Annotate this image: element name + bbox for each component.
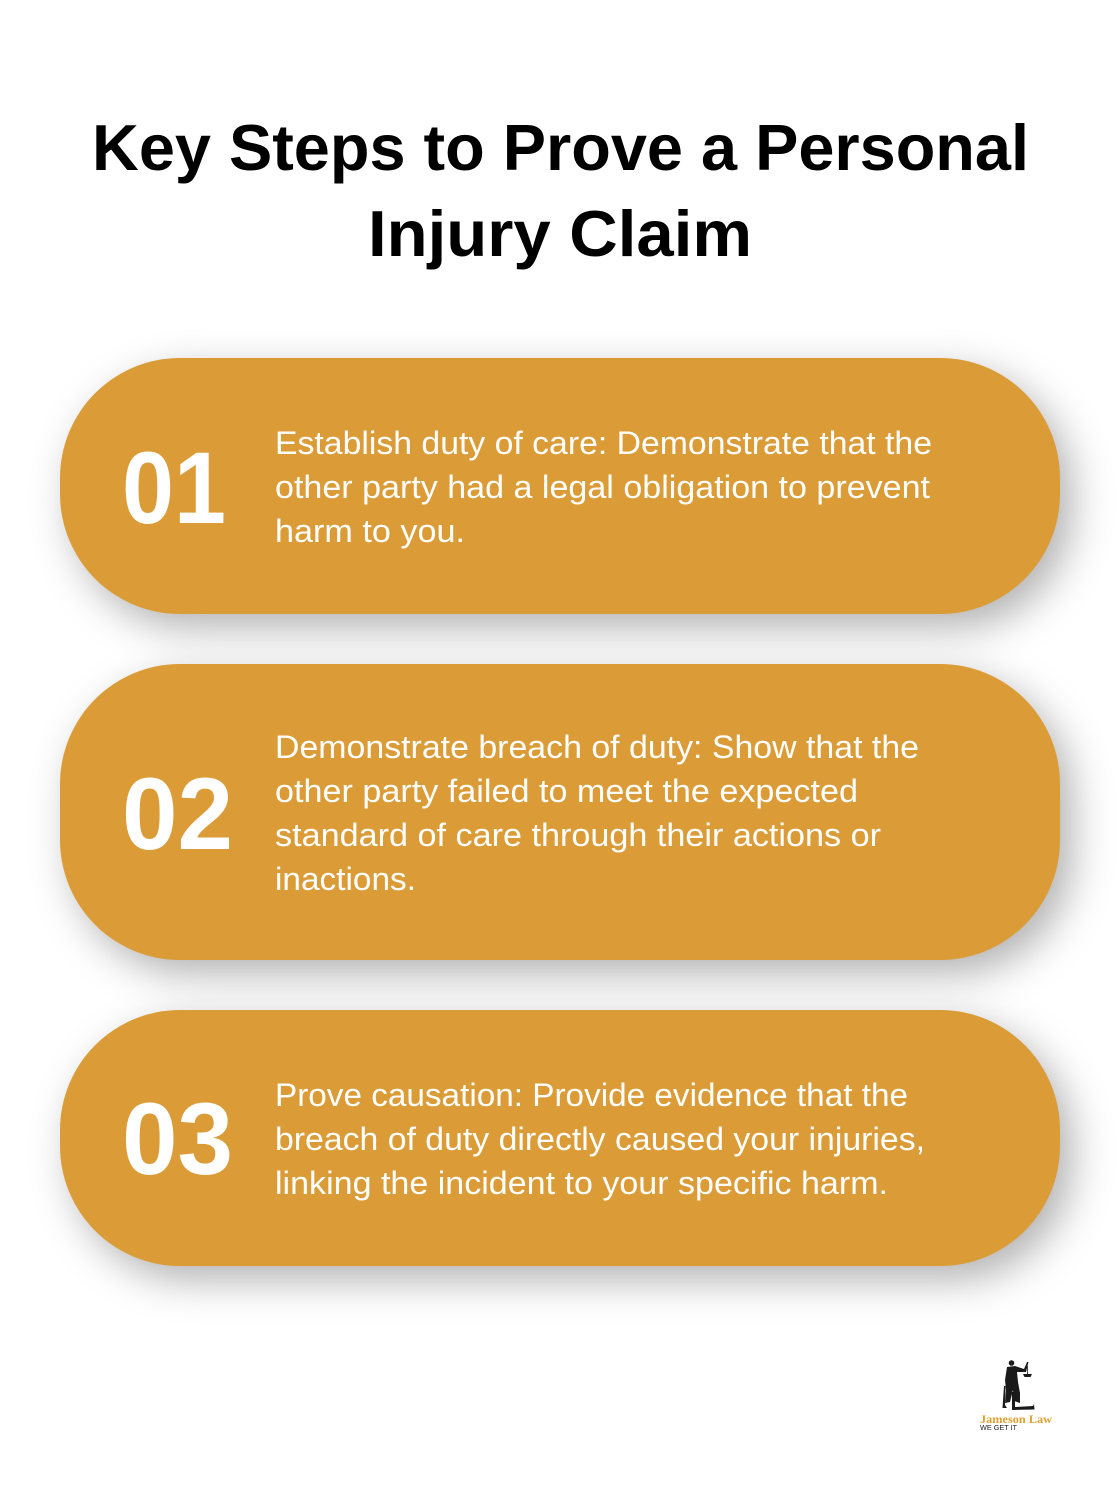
panel: step 03 xyxy=(60,1010,1072,1280)
text: step 03: Prove causation: Provide evidence that the xyxy=(275,1077,908,1113)
number 02: 02 xyxy=(122,757,233,871)
number 03: 03 xyxy=(122,1082,233,1196)
logo: Jameson Law xyxy=(980,1360,1053,1432)
title: Injury Claim xyxy=(368,197,752,270)
text: step 01: harm to you. xyxy=(275,513,465,549)
text: step 02: standard of care through their actions or xyxy=(275,817,881,853)
text: step 03: linking the incident to your specific harm. xyxy=(275,1165,888,1201)
title: Key Steps to Prove a Personal xyxy=(92,111,1029,184)
text: step 02: other party failed to meet the expected xyxy=(275,773,858,809)
title xyxy=(92,111,1029,270)
text: step 02: Demonstrate breach of duty: Show that the xyxy=(275,729,919,765)
card background 02 xyxy=(60,664,1060,960)
panel: step 02 xyxy=(60,664,1072,974)
text: step 03 xyxy=(275,1077,925,1201)
text: step 03: breach of duty directly caused your injuries, xyxy=(275,1121,925,1157)
text: step 01: other party had a legal obligation to prevent xyxy=(275,469,930,505)
text: step 01 xyxy=(275,425,932,549)
card background 03 xyxy=(60,1010,1060,1266)
number 01: 01 xyxy=(122,431,226,545)
panel: step 01 xyxy=(60,358,1072,628)
logo tagline: WE GET IT xyxy=(980,1425,1018,1432)
text: step 02 xyxy=(275,729,919,897)
text: step 02: inactions. xyxy=(275,861,416,897)
card background 01 xyxy=(60,358,1060,614)
logo wordmark: Jameson Law xyxy=(980,1414,1053,1426)
icon: lady justice xyxy=(1002,1360,1034,1410)
text: step 01: Establish duty of care: Demonstrate that the xyxy=(275,425,932,461)
